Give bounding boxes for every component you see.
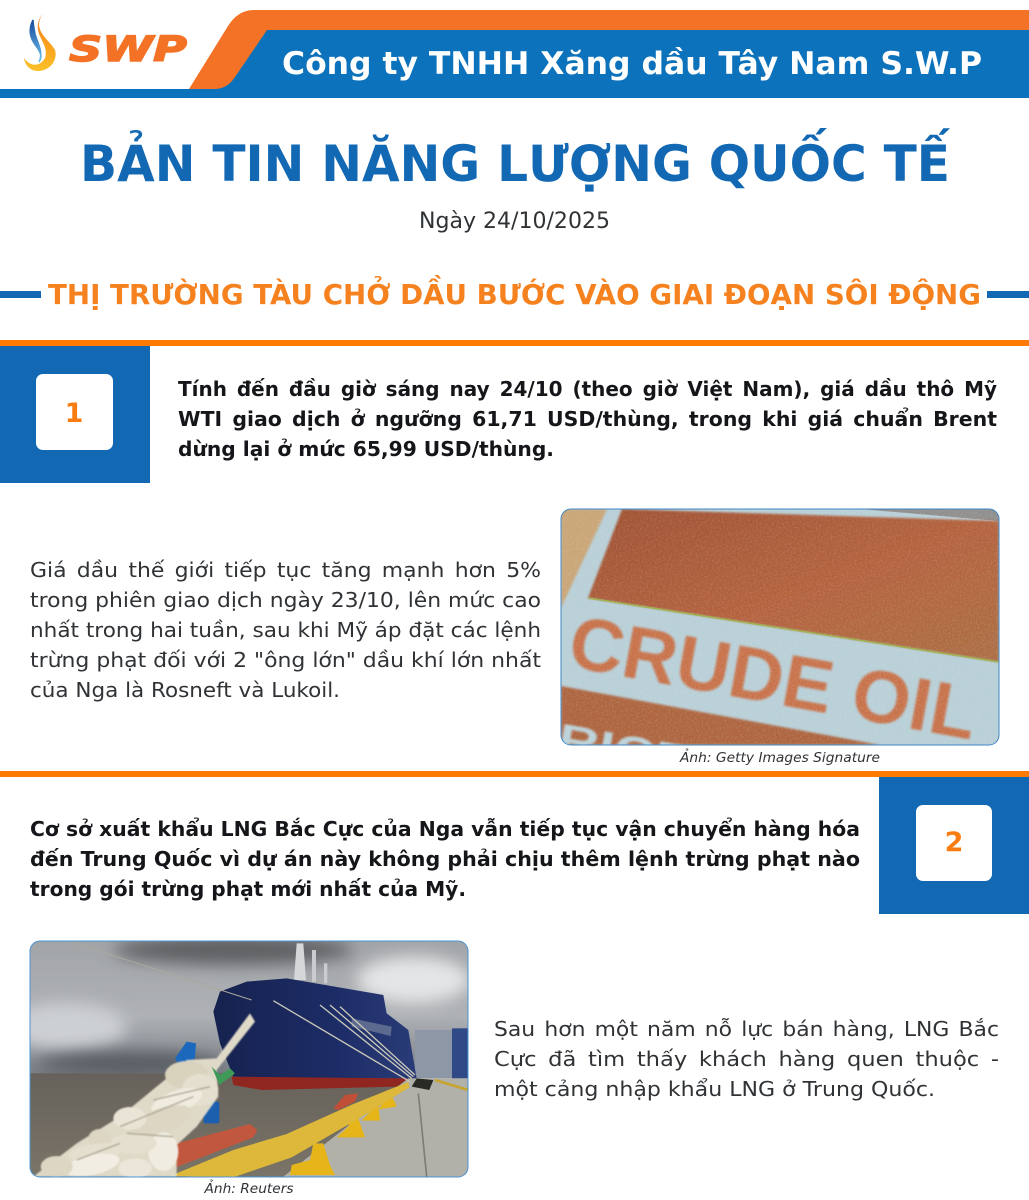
header banner bbox=[0, 10, 1029, 98]
item 1 lead text bbox=[178, 377, 997, 461]
water bbox=[30, 1073, 417, 1177]
item 2 body text: Cực đã tìm thấy khách hàng quen thuộc - bbox=[494, 1047, 999, 1071]
wood corner bbox=[561, 509, 607, 608]
number badge 1: 1 bbox=[65, 398, 83, 429]
title: BẢN TIN NĂNG LƯỢNG QUỐC TẾ bbox=[80, 128, 951, 193]
mast bbox=[294, 943, 306, 980]
wordmark: SWP bbox=[69, 30, 187, 70]
yellow pipe bbox=[170, 1082, 409, 1177]
sky bbox=[30, 941, 468, 1078]
grey corner bbox=[860, 509, 999, 521]
item 2 lead text: đến Trung Quốc vì dự án này không phải chịu thêm lệnh trừng phạt nào bbox=[30, 847, 860, 871]
number badge 1 bbox=[0, 346, 150, 483]
item 1 body text: nhất trong hai tuần, sau khi Mỹ áp đặt các lệnh bbox=[30, 618, 541, 642]
panel: item 2 bbox=[0, 771, 1029, 1197]
item 1 body text: Giá dầu thế giới tiếp tục tăng mạnh hơn 5% bbox=[30, 558, 541, 582]
paper texture bbox=[561, 509, 999, 745]
ship hull bbox=[213, 978, 417, 1078]
thick white rope bbox=[33, 1013, 255, 1181]
number badge 2 bbox=[879, 777, 1029, 914]
item 1 lead text: Tính đến đầu giờ sáng nay 24/10 (theo giờ Việt Nam), giá dầu thô Mỹ bbox=[178, 377, 997, 401]
item 2 lead text: trong gói trừng phạt mới nhất của Mỹ. bbox=[30, 877, 466, 901]
photo: LNG tanker bbox=[7, 935, 470, 1181]
green tag bbox=[212, 1067, 235, 1085]
mooring ropes bbox=[273, 1001, 415, 1082]
caption: Getty: Ảnh: Getty Images Signature bbox=[679, 749, 880, 766]
photo: crude oil: RICE bbox=[554, 715, 696, 784]
item 2 lead text bbox=[30, 817, 860, 901]
red fenders bbox=[173, 1124, 257, 1168]
lower brown strip bbox=[561, 686, 880, 745]
panel: item 1 bbox=[0, 340, 1029, 784]
printed words on the label: CRUDE OIL bbox=[563, 600, 983, 755]
item 1 body text: của Nga là Rosneft và Lukoil. bbox=[30, 678, 340, 702]
item 1 body text bbox=[30, 558, 541, 702]
quay bbox=[283, 1078, 468, 1177]
item 2 lead text: Cơ sở xuất khẩu LNG Bắc Cực của Nga vẫn tiếp tục vận chuyển hàng hóa bbox=[30, 817, 860, 841]
brown label area bbox=[588, 509, 999, 662]
date: Ngày 24/10/2025 bbox=[419, 209, 610, 234]
section heading: THỊ TRƯỜNG TÀU CHỞ DẦU BƯỚC VÀO GIAI ĐOẠN SÔI ĐỘNG bbox=[48, 273, 981, 311]
blue bollard bbox=[175, 1042, 196, 1063]
pipe supports bbox=[290, 1143, 335, 1175]
company name: Công ty TNHH Xăng dầu Tây Nam S.W.P bbox=[282, 46, 982, 82]
photo: crude oil bbox=[560, 508, 1000, 746]
item 2 body text: Sau hơn một năm nỗ lực bán hàng, LNG Bắc bbox=[494, 1017, 999, 1041]
shore building bbox=[415, 1030, 468, 1078]
number badge 2: 2 bbox=[945, 827, 963, 858]
ship name plate bbox=[352, 1018, 392, 1036]
item 1 lead text: dừng lại ở mức 65,99 USD/thùng. bbox=[178, 437, 554, 461]
icon: flame bbox=[24, 14, 56, 71]
item 1 body text: trong phiên giao dịch ngày 23/10, lên mức cao bbox=[30, 588, 541, 612]
caption: Reuters: Ảnh: Reuters bbox=[203, 1180, 294, 1197]
logo: SWP bbox=[24, 14, 187, 71]
item 1 body text: trừng phạt đối với 2 "ông lớn" dầu khí lớn nhất bbox=[30, 648, 541, 672]
item 1 lead text: WTI giao dịch ở ngưỡng 61,71 USD/thùng, trong khi giá chuẩn Brent bbox=[178, 407, 997, 431]
item 2 body text bbox=[494, 1017, 999, 1101]
item 2 body text: một cảng nhập khẩu LNG ở Trung Quốc. bbox=[494, 1077, 935, 1101]
bollard bbox=[412, 1078, 433, 1090]
